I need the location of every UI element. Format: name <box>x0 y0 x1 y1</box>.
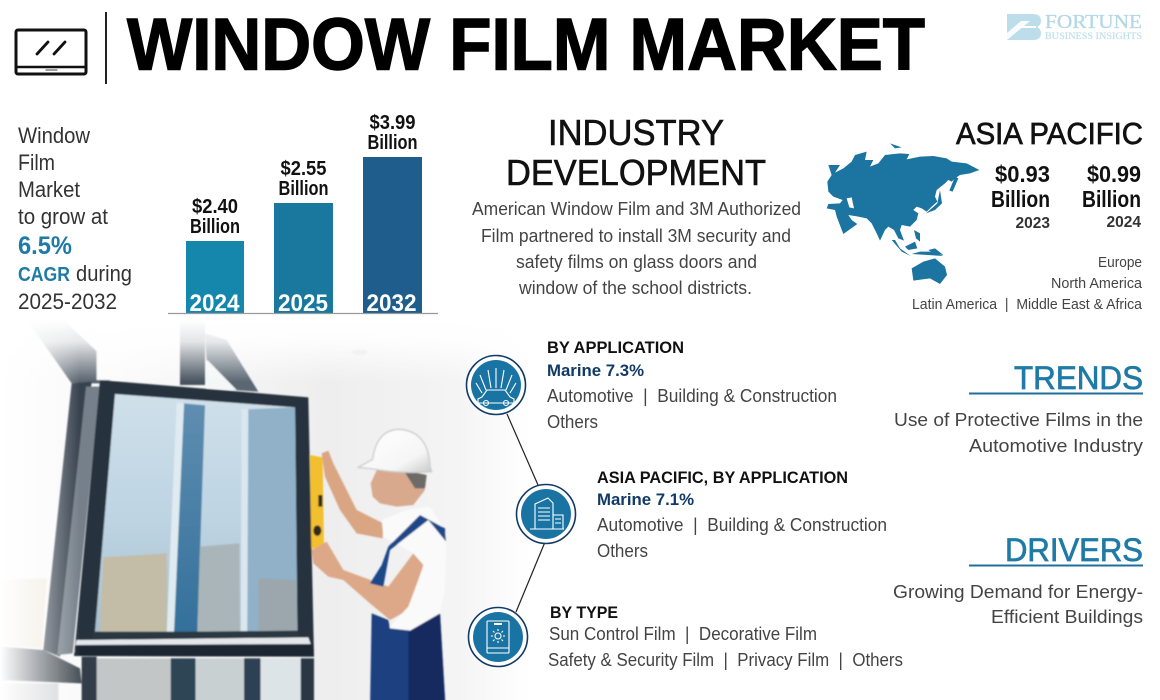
text: CAGR summary: Market <box>18 177 80 202</box>
text: Asia Pacific by application <box>597 468 887 561</box>
heading: Asia Pacific: ASIA PACIFIC <box>956 116 1143 151</box>
text: by type <box>548 603 903 670</box>
text: other regions: Latin America | Middle East & Africa <box>912 296 1143 313</box>
text: by application: Marine 7.3% <box>547 361 644 380</box>
text: trends: Use of Protective Films in the <box>894 410 1143 430</box>
heading: trends: TRENDS <box>1014 360 1143 396</box>
bar 2032: $3.99 <box>370 112 416 134</box>
text: trends <box>894 410 1143 456</box>
text: industry development <box>472 199 801 298</box>
bar 2032: Billion <box>368 132 418 154</box>
heading: industry development: DEVELOPMENT <box>506 152 766 193</box>
text: CAGR summary: Window <box>18 123 90 148</box>
text: CAGR summary <box>18 123 132 314</box>
bar 2024: $2.40 <box>192 196 238 218</box>
stat: 2023 value: Billion <box>991 186 1050 212</box>
bar chart: market size <box>168 112 438 317</box>
icon: window laptop <box>16 30 86 74</box>
bar 2025: Billion <box>278 178 328 200</box>
text: by application: BY APPLICATION <box>547 338 684 357</box>
heading: industry development <box>506 112 766 193</box>
heading: industry development: INDUSTRY <box>548 112 724 153</box>
stat: 2023 value <box>991 161 1050 232</box>
text: industry development: safety films on glass doors and <box>516 252 757 272</box>
text: Asia Pacific by application: ASIA PACIFIC, BY APPLICATION <box>597 468 848 487</box>
logo: Fortune Business Insights <box>1007 11 1142 42</box>
bar 2032: 2032 <box>366 290 416 317</box>
heading: drivers: DRIVERS <box>1005 532 1143 568</box>
text: by application <box>547 338 837 432</box>
text: Asia Pacific by application: Marine 7.1% <box>597 490 694 509</box>
text: CAGR summary: CAGR <box>18 264 70 286</box>
text: other regions: Europe <box>1098 254 1142 271</box>
logo: Fortune Business Insights: BUSINESS INSIGHTS <box>1045 32 1142 42</box>
text: drivers <box>893 582 1143 627</box>
text: Asia Pacific by application: Others <box>597 541 648 561</box>
photo edge fade <box>0 320 476 700</box>
title divider <box>105 12 107 84</box>
stat: 2024 value <box>1082 161 1141 231</box>
text: by application: Automotive | Building & Construction <box>547 386 837 406</box>
text: CAGR summary: to grow at <box>18 204 108 229</box>
bar 2032 <box>363 112 422 317</box>
text: industry development: window of the school districts. <box>518 278 752 298</box>
text: by type: Safety & Security Film | Privacy Film | Others <box>548 650 903 670</box>
text: industry development: American Window Film and 3M Authorized <box>472 199 801 219</box>
text: by type: BY TYPE <box>550 603 618 622</box>
text: CAGR summary: Film <box>18 150 55 175</box>
stat: 2023 value: $0.93 <box>995 161 1050 187</box>
bar 2025: $2.55 <box>280 158 326 180</box>
text: CAGR summary: 6.5% <box>18 232 72 260</box>
icon: sun control film <box>468 608 528 666</box>
bar 2025 <box>274 158 333 317</box>
stat: 2024 value: Billion <box>1082 186 1141 212</box>
title: WINDOW FILM MARKET <box>127 4 925 86</box>
icon: connected car <box>466 356 526 414</box>
text: drivers: Growing Demand for Energy- <box>893 582 1143 602</box>
bar 2024: Billion <box>190 216 240 238</box>
text: Asia Pacific by application: Automotive | Building & Construction <box>597 515 887 535</box>
text: by type: Sun Control Film | Decorative Film <box>549 624 817 644</box>
text: CAGR summary: 2025-2032 <box>18 289 117 314</box>
text: trends: Automotive Industry <box>969 436 1143 456</box>
text: industry development: Film partnered to install 3M security and <box>481 226 791 246</box>
text: drivers: Efficient Buildings <box>991 607 1143 627</box>
icon: buildings <box>516 484 576 544</box>
bar 2024 <box>186 196 244 317</box>
map: Asia Pacific <box>827 143 979 284</box>
photo: worker installing window <box>4 326 476 700</box>
text: CAGR summary: during <box>76 261 132 286</box>
text: other regions <box>912 254 1143 313</box>
logo: Fortune Business Insights: FORTUNE <box>1045 11 1142 33</box>
stat: 2023 value: 2023 <box>1016 215 1050 232</box>
bar 2024: 2024 <box>190 290 240 317</box>
bar 2025: 2025 <box>278 290 328 317</box>
text: other regions: North America <box>1051 275 1143 292</box>
stat: 2024 value: 2024 <box>1107 214 1141 231</box>
text: by application: Others <box>547 412 598 432</box>
timeline connectors <box>507 414 545 612</box>
stat: 2024 value: $0.99 <box>1087 161 1141 187</box>
